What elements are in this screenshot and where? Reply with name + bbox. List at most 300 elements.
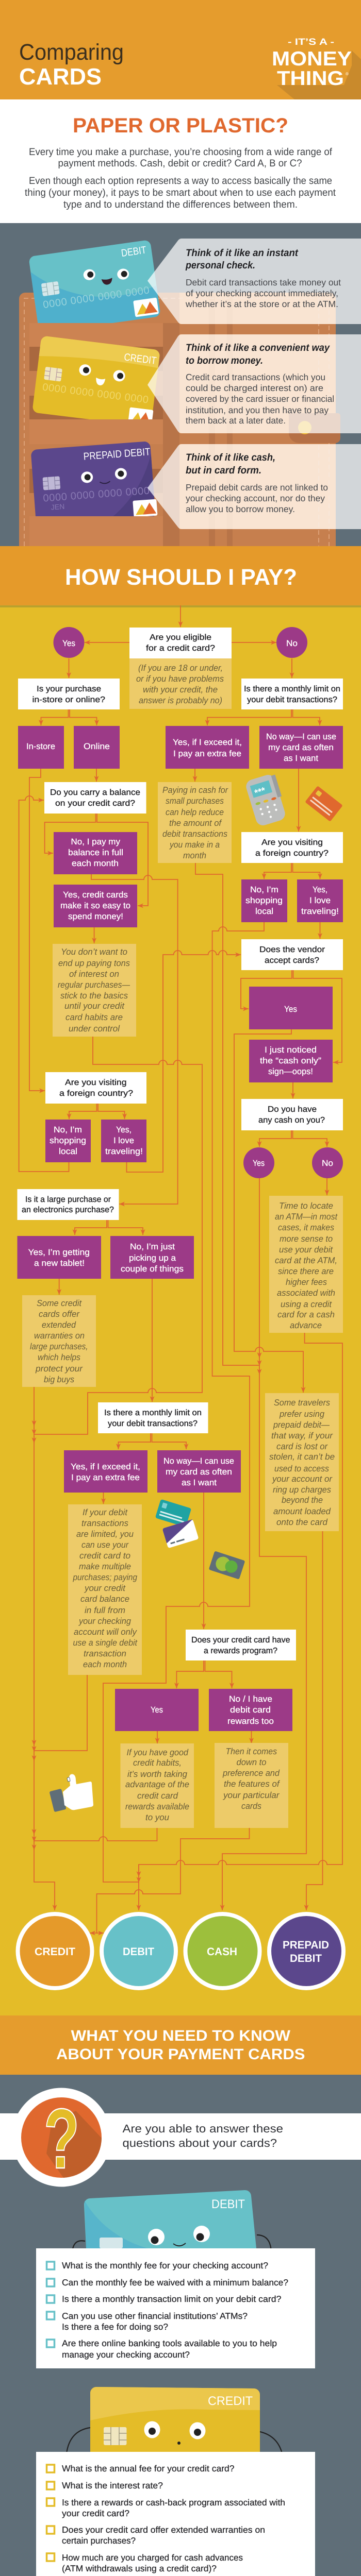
flow note: ATM: higher fees <box>286 1277 327 1287</box>
card: credit: CREDIT <box>123 351 157 367</box>
flow note: warranties: cards offer <box>39 1309 80 1319</box>
flow note: ATM: use your debit <box>279 1245 333 1255</box>
flow: cash only <box>249 1040 333 1082</box>
icon: orange card <box>305 786 343 822</box>
flow: easy to spend: make it so easy to <box>60 901 130 910</box>
arrow: debit line <box>138 1865 139 1910</box>
flow: large purchase question: an electronics purchase? <box>22 1206 114 1214</box>
flow note: travelers: prepaid debit— <box>273 1420 330 1430</box>
flow: rewards no <box>209 1689 292 1731</box>
flow: pay in full <box>54 832 137 874</box>
arrow: no to note <box>251 1731 252 1743</box>
flow: rewards question: Does your credit card have <box>191 1636 290 1645</box>
flow note: paying in cash <box>158 782 232 863</box>
arrow: vendor to cash only <box>293 970 342 1062</box>
arrow: note to credit <box>34 1037 202 1434</box>
flow: foreign country question right: a foreign country? <box>255 849 329 858</box>
arrow: rewards note to credit <box>34 1828 157 1841</box>
flow note: travelers: card is lost or <box>276 1442 328 1451</box>
card: prepaid debit <box>31 441 158 527</box>
flow: yes extra fee 2: Yes, if I exceed it, <box>71 1462 140 1471</box>
flow note: debit limited: use a single debit <box>73 1638 138 1648</box>
card: credit <box>32 335 161 429</box>
callout: debit: whether it’s at the store or at the ATM. <box>185 299 338 309</box>
flow: new tablet: Yes, I’m getting <box>28 1248 90 1257</box>
flow note: ATM: since there are <box>278 1266 334 1276</box>
arrow: limit to no way <box>293 709 320 725</box>
flow: carry a balance question: Do you carry a balance <box>50 788 140 797</box>
text block: intro: Every time you make a purchase, you’re choosing from a wide range of <box>29 146 333 158</box>
flow: cash only: I just noticed <box>265 1045 317 1055</box>
flow: eligible question: Are you eligible <box>150 633 211 642</box>
flow note: debit limited: your checking <box>78 1616 132 1626</box>
text block: intro: type and to understand the differences between them. <box>63 199 298 210</box>
flow note: preference: Then it comes <box>226 1747 277 1756</box>
arrow: balance to yes <box>97 814 148 906</box>
arrow: either debit <box>97 1933 104 1934</box>
flow: purchase question: in-store or online? <box>32 696 105 704</box>
flow note: travelers: ring up charges <box>273 1485 331 1495</box>
arrow: foreign 2 to no <box>69 1104 97 1119</box>
flow note: travelers: Some travelers <box>274 1398 330 1408</box>
outcome: credit <box>15 1912 94 1990</box>
flow: love traveling right: I love <box>309 896 331 905</box>
flow note: preference <box>215 1743 288 1828</box>
arrow: balance to no <box>45 814 96 853</box>
flow note: debit limited: can use your <box>81 1540 129 1550</box>
arrow: foreign to yes <box>293 863 320 879</box>
flow note: good credit habits: credit card <box>137 1791 178 1801</box>
arrow: local to debit <box>103 922 264 1882</box>
callout: prepaid <box>147 444 361 529</box>
flow note: ATM: more sense to <box>280 1234 333 1244</box>
card: credit: 0000 0000 0000 0000 <box>42 381 149 406</box>
outcome: prepaid debit: PREPAID <box>283 1939 329 1951</box>
flow: rewards question <box>186 1630 296 1660</box>
checkbox item: Is there a monthly transaction limit on your debit card? <box>62 2294 282 2304</box>
flow note: good credit habits: rewards available <box>125 1802 189 1811</box>
flow note: debit limited: make multiple <box>79 1562 131 1571</box>
card: debit <box>28 240 161 333</box>
flow: vendor yes <box>249 987 333 1029</box>
arrow: left traveling to vendor <box>127 951 241 1172</box>
checkbox item: your credit card? <box>62 2509 129 2518</box>
callout: credit: Think of it like a convenient way <box>186 342 330 353</box>
callout: credit: institution, and you then have to pay <box>186 405 329 415</box>
flow note: debit limited <box>68 1504 142 1675</box>
text block: intro: thing (your money), it pays to be smart about when to use each payment <box>25 187 336 198</box>
flow: no way 2: my card as often <box>166 1467 232 1477</box>
flow note: travelers: used to access <box>274 1464 329 1473</box>
logo: It's a Money Thing: MONEY <box>272 48 352 70</box>
flow note: debit limited: in full from <box>85 1605 125 1615</box>
banner: questions prompt <box>0 2113 361 2160</box>
flow: love traveling right <box>297 879 343 922</box>
flow: no way: as I want <box>284 754 318 763</box>
arrow: purchase to online <box>70 709 97 725</box>
arrow: debit limit note to credit <box>34 1675 87 1751</box>
heading: what you need to know <box>56 2027 305 2063</box>
panel: How should I pay band <box>0 546 361 607</box>
heading: what you need to know: WHAT YOU NEED TO KNOW <box>71 2027 290 2044</box>
flow: shopping local right: shopping <box>245 896 283 905</box>
flow: eligible question: for a credit card? <box>146 644 215 653</box>
callout: prepaid: but in card form. <box>186 465 261 476</box>
title: Comparing Cards: Comparing <box>19 40 124 65</box>
banner: questions prompt: questions about your cards? <box>123 2137 277 2149</box>
arrow: rewards to no <box>205 1660 232 1688</box>
arrow: either credit <box>90 1933 97 1934</box>
flow note: paying in cash: small purchases <box>166 796 224 806</box>
flow: shopping local left: No, I’m <box>54 1125 82 1134</box>
flow: any cash question: Do you have <box>268 1105 317 1114</box>
arrow: tablet to note <box>59 1279 60 1295</box>
flow: rewards yes: Yes <box>151 1705 163 1715</box>
flow: monthly limit question 2 <box>98 1402 208 1433</box>
outcome: cash <box>184 1912 262 1990</box>
flow: cash only: the “cash only” <box>260 1056 321 1065</box>
flow note: paying interest: card habits are <box>65 1012 123 1022</box>
flow note: ATM: card for a cash <box>277 1310 335 1319</box>
callout: credit: Credit card transactions (which you <box>186 372 325 382</box>
icon: question mark badge <box>18 2088 105 2187</box>
flow note: paying interest: stick to the basics <box>60 991 128 1001</box>
checkbox item: How much are you charged for cash advances <box>62 2553 243 2563</box>
flow: shopping local right: local <box>255 907 273 916</box>
arrow: eligible to no <box>232 642 276 643</box>
flow: carry a balance question <box>44 782 146 814</box>
arrow: large to yes <box>75 1220 107 1235</box>
flow: easy to spend <box>54 885 137 927</box>
arrow: eligible to yes <box>85 642 129 643</box>
flow: cash no circle <box>312 1147 343 1178</box>
checkbox item <box>46 2338 277 2360</box>
arrow: foreign to no <box>264 863 291 879</box>
flow note: paying interest: You don’t want to <box>61 947 127 957</box>
title: Comparing Cards: CARDS <box>19 63 102 90</box>
flow note: debit limited: account will only <box>74 1627 137 1637</box>
flow: foreign country question left: a foreign country? <box>59 1089 133 1098</box>
flow: love traveling left: traveling! <box>105 1147 143 1156</box>
checkbox item: Can the monthly fee be waived with a minimum balance? <box>62 2278 288 2287</box>
arrow: yes to purchase type <box>68 658 69 678</box>
flow: rewards no: No / I have <box>229 1694 272 1704</box>
arrow: large to no <box>108 1220 143 1235</box>
arrow: no way to foreign <box>298 769 299 832</box>
arrow: vendor to yes <box>241 970 292 1009</box>
checkbox item: What is the annual fee for your credit card? <box>62 2464 234 2473</box>
flow: in-store <box>18 726 64 769</box>
flow note: travelers: beyond the <box>282 1495 323 1505</box>
arrow: no to ATM note <box>326 1178 327 1195</box>
flow note: debit limited: your credit <box>84 1583 126 1593</box>
arrow: online to carry a balance <box>96 769 97 782</box>
flow note: paying in cash: month <box>183 851 206 860</box>
callout: prepaid: Prepaid debit cards are not linked to <box>186 482 328 493</box>
flow: pay in full: each month <box>72 859 119 868</box>
flow: vendor question <box>241 939 343 970</box>
flow: easy to spend: Yes, credit cards <box>63 890 128 900</box>
flow note: paying interest: under control <box>69 1024 120 1033</box>
flow: foreign country question right: Are you visiting <box>261 838 323 847</box>
arrow: limit 2 to no <box>152 1433 186 1449</box>
arrow: limit 2 to yes <box>119 1433 151 1449</box>
flow note: warranties: Some credit <box>37 1298 82 1308</box>
flow: any cash question: any cash on you? <box>258 1116 325 1125</box>
arrow: yes to travelers note <box>234 1029 303 1393</box>
panel: white intro background <box>0 99 361 223</box>
flow: pay in full: balance in full <box>68 848 123 857</box>
flow: vendor question: Does the vendor <box>259 945 325 954</box>
arrow: exceed 2 to note <box>103 1493 104 1504</box>
flow note: good credit habits: credit habits, <box>133 1758 182 1768</box>
flow: foreign country question right <box>241 832 343 863</box>
flow note: warranties: big buys <box>44 1375 74 1384</box>
icon: card terminal <box>244 773 288 827</box>
outcome: debit <box>100 1912 178 1990</box>
arrow: yes to note <box>94 927 95 943</box>
checkbox item: Can you use other financial institutions’ ATMs? <box>62 2311 248 2321</box>
arrow: yes to cash <box>222 1178 306 1910</box>
flow: no way: No way—I can use <box>266 732 336 741</box>
flow: in-store: In-store <box>26 742 55 751</box>
flow note: ATM: advance <box>290 1320 322 1330</box>
flow: vendor yes: Yes <box>284 1005 297 1014</box>
flow note: paying in cash: debit transactions <box>162 829 227 839</box>
heading: How should I pay: HOW SHOULD I PAY? <box>65 565 297 590</box>
card character: debit <box>72 2190 271 2252</box>
flow note: preference: the features of <box>224 1779 281 1789</box>
flow note: eligibility <box>129 658 232 709</box>
banner: questions prompt: Are you able to answer these <box>123 2122 283 2135</box>
wallet clasp <box>289 413 340 443</box>
flow note: ATM: card at the ATM, <box>275 1256 337 1265</box>
arrowheads along merging lines <box>34 1352 259 1883</box>
flow note: ATM: using a credit <box>281 1299 332 1309</box>
flow note: preference: down to <box>236 1757 266 1767</box>
callout: debit: of your checking account immediately, <box>186 288 338 298</box>
flow note: debit limited: card balance <box>80 1594 129 1604</box>
checkbox item: Does your credit card offer extended warranties on <box>62 2525 265 2535</box>
arrow: pay in full to large purchase <box>91 874 178 1204</box>
checkbox item <box>46 2525 265 2546</box>
icon: card terminal: *** <box>253 785 267 798</box>
checkbox item: (ATM withdrawals using a credit card)? <box>62 2564 217 2573</box>
flow note: debit limited: purchases; paying <box>73 1572 137 1582</box>
flow note: debit limited: each month <box>83 1659 127 1669</box>
arrow: no to monthly limit <box>291 658 292 678</box>
checkbox item: What is the interest rate? <box>62 2481 163 2490</box>
flow note: preference: preference and <box>222 1768 280 1778</box>
logo: It's a Money Thing <box>272 37 361 99</box>
flow: yes extra fee: I pay an extra fee <box>173 749 241 758</box>
callout: prepaid: Think of it like cash, <box>186 452 275 463</box>
flow note: ATM: associated with <box>277 1288 335 1298</box>
flow: shopping local left: shopping <box>50 1136 86 1145</box>
outcome: credit: CREDIT <box>35 1946 75 1958</box>
arrow: any cash to no <box>293 1130 327 1147</box>
flow: no way: my card as often <box>268 743 334 752</box>
flow: couple of things <box>110 1236 194 1279</box>
flow: monthly limit question <box>241 679 343 709</box>
flow: rewards yes <box>115 1689 199 1731</box>
flow: monthly limit question: your debit transactions? <box>247 696 337 704</box>
flow: no circle <box>276 627 307 658</box>
flow: monthly limit question 2: your debit transactions? <box>108 1419 198 1428</box>
flow note: warranties: which helps <box>38 1352 80 1362</box>
icon: grey card with circles <box>209 1551 245 1580</box>
flow note: paying interest: end up paying tons <box>58 958 130 968</box>
wallet pocket 3 <box>29 516 163 546</box>
card character: credit <box>67 2387 282 2453</box>
flow note: preference: cards <box>241 1801 261 1811</box>
flow: couple of things: couple of things <box>121 1264 184 1274</box>
callout: credit: to borrow money. <box>186 355 263 366</box>
arrow: yes to note <box>157 1731 158 1743</box>
flow: monthly limit question 2: Is there a monthly limit on <box>104 1409 202 1417</box>
arrow: foreign 2 to yes <box>98 1104 125 1119</box>
card: prepaid debit: JEN <box>51 502 65 512</box>
flow: eligible question <box>129 628 232 709</box>
icon: purple and white card <box>162 1519 199 1548</box>
flow note: debit limited: transaction <box>84 1649 126 1658</box>
flow: couple of things: No, I’m just <box>130 1242 175 1251</box>
flow: no circle: No <box>286 639 298 648</box>
arrow: rewards note to credit or debit <box>97 1828 250 1933</box>
flow note: warranties: warranties on <box>34 1331 85 1341</box>
icon: question mark badge: ? <box>44 2091 79 2186</box>
flow note: paying interest: until your credit <box>64 1001 125 1011</box>
panel: debit questions <box>36 2248 315 2368</box>
flow: new tablet <box>18 1236 101 1279</box>
flow note: ATM <box>269 1196 343 1333</box>
flow note: travelers: amount loaded <box>273 1506 331 1516</box>
flow note: warranties: protect your <box>35 1364 83 1374</box>
arrow: start <box>180 605 181 627</box>
checkbox item: Is there a rewards or cash-back program associated with <box>62 2498 285 2507</box>
flow: rewards question: a rewards program? <box>204 1647 277 1655</box>
flow: cash yes circle <box>243 1147 274 1178</box>
flow: shopping local right: No, I’m <box>250 885 278 894</box>
flow: online: Online <box>84 742 110 751</box>
flow: large purchase question: Is it a large purchase or <box>25 1195 111 1204</box>
flow: yes extra fee <box>166 726 249 769</box>
outcome: cash: CASH <box>207 1946 237 1958</box>
flow: easy to spend: spend money! <box>68 912 123 921</box>
flow note: good credit habits <box>121 1743 194 1828</box>
arrow: note to credit main line <box>34 1387 55 1910</box>
callout: prepaid: allow you to borrow money. <box>186 504 295 514</box>
flow note: travelers <box>265 1393 339 1531</box>
flow: yes extra fee: Yes, if I exceed it, <box>173 738 242 747</box>
icon: teal card <box>155 1499 191 1527</box>
flow: shopping local left <box>45 1120 91 1162</box>
card: prepaid debit: PREPAID DEBIT <box>83 446 151 463</box>
text block: intro <box>25 146 336 210</box>
flow note: debit limited: If your debit <box>83 1507 128 1517</box>
flow: vendor question: accept cards? <box>265 956 319 965</box>
flow note: paying in cash: you make in a <box>169 840 220 850</box>
arrow: cash note to cash <box>195 863 259 1365</box>
flow: yes extra fee 2: I pay an extra fee <box>71 1473 140 1482</box>
panel: credit questions <box>36 2452 315 2576</box>
arrow: exceed to note <box>194 769 195 782</box>
flow note: ATM: Time to locate <box>279 1201 333 1211</box>
flow: yes circle: Yes <box>62 639 75 648</box>
outcome: debit: DEBIT <box>123 1946 154 1958</box>
arrow: travelers note to prepaid <box>306 1531 323 1910</box>
flow: yes circle <box>54 627 85 658</box>
flow: yes extra fee 2 <box>64 1450 147 1493</box>
flow note: paying in cash: the amount of <box>169 818 222 828</box>
panel: header band <box>0 0 361 99</box>
heading: Paper or Plastic: PAPER OR PLASTIC? <box>73 114 288 137</box>
flow: large purchase question <box>18 1189 119 1220</box>
card character: debit: DEBIT <box>211 2197 245 2211</box>
flow note: travelers: onto the card <box>276 1517 328 1527</box>
flow: no way <box>259 726 343 769</box>
flow note: paying in cash: Paying in cash for <box>162 785 228 795</box>
flow note: travelers: prefer using <box>279 1409 325 1419</box>
flow: cash yes circle: Yes <box>253 1159 265 1168</box>
flow: no way 2 <box>157 1450 241 1493</box>
card: debit: DEBIT <box>121 244 147 259</box>
flow note: travelers: that way, if your <box>271 1431 333 1440</box>
wallet pocket 1 <box>29 323 163 347</box>
card character: credit: CREDIT <box>208 2394 253 2408</box>
arrow: couple of things to monthly limit <box>152 1279 153 1402</box>
flow: couple of things: picking up a <box>129 1253 176 1263</box>
checkbox item <box>46 2311 248 2332</box>
arrow: traveling to vendor <box>320 922 321 939</box>
flow: foreign country question left <box>45 1072 146 1104</box>
title: Comparing Cards <box>19 40 124 90</box>
callout: debit: Think of it like an instant <box>186 247 299 259</box>
flow: no way 2: No way—I can use <box>163 1456 234 1466</box>
callout: debit: Debit card transactions take money out <box>186 277 341 287</box>
logo: It's a Money Thing: THING <box>277 67 344 90</box>
flow: love traveling left <box>101 1120 146 1162</box>
flow note: eligibility: (If you are 18 or under, <box>138 663 223 673</box>
checkbox item <box>46 2553 243 2573</box>
arrow: local to carry a balance <box>19 796 69 1172</box>
flow note: ATM: cases, it makes <box>278 1223 334 1232</box>
checkbox item: What is the monthly fee for your checking account? <box>62 2261 268 2270</box>
flow: purchase question: Is your purchase <box>37 685 101 693</box>
flow: love traveling right: Yes, <box>313 885 327 894</box>
card: prepaid debit: 0000 0000 0000 0000 <box>43 485 150 504</box>
flow: love traveling left: I love <box>113 1136 134 1145</box>
card: debit: 0000 0000 0000 0000 <box>42 284 150 311</box>
arrow: any cash to yes <box>259 1130 291 1147</box>
flow note: travelers: stolen, it can’t be <box>269 1452 335 1462</box>
panel: grey questions background <box>0 2075 361 2576</box>
arrow: purchase to in-store <box>41 709 68 725</box>
arrow: rewards to yes <box>176 1660 204 1688</box>
arrow: cash only to any cash <box>292 1082 293 1098</box>
flow: carry a balance question: on your credit card? <box>55 799 135 808</box>
callout: credit: covered by the card issuer or financial <box>186 394 334 404</box>
flow: monthly limit question: Is there a monthly limit on <box>244 685 340 693</box>
flow note: travelers: your account or <box>272 1474 333 1484</box>
flow note: eligibility: with your credit, the <box>143 685 218 694</box>
flow: shopping local right <box>241 879 287 922</box>
flow note: good credit habits: If you have good <box>127 1748 189 1757</box>
flow note: warranties <box>22 1295 96 1387</box>
flow note: good credit habits: to you <box>145 1812 170 1822</box>
logo: It's a Money Thing: ® <box>346 72 349 76</box>
flow note: eligibility: or if you have problems <box>136 674 224 684</box>
